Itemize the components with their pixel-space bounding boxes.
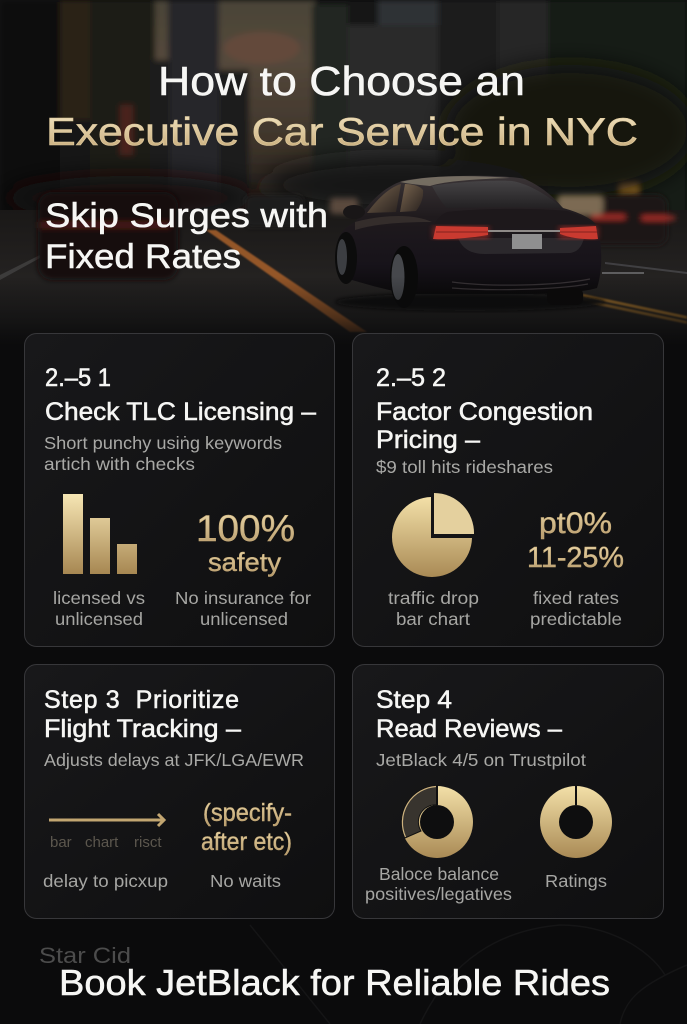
step description: [44, 433, 282, 474]
call to action: Book JetBlack for Reliable Rides: [59, 962, 610, 1003]
step description: JetBlack 4/5 on Trustpilot: [376, 750, 586, 770]
step heading: Pricing –: [376, 426, 480, 454]
step heading: Check TLC Licensing –: [45, 398, 316, 426]
rear window: [432, 181, 563, 208]
chart caption: unlicensed: [55, 609, 143, 629]
stat caption: [530, 588, 622, 629]
stat caption: predictable: [530, 609, 622, 629]
step heading: [44, 686, 241, 743]
chrome strip: [486, 230, 562, 232]
donut chart: ratings: [540, 785, 612, 858]
panel: step 1 licensing: [24, 334, 334, 646]
donut chart: balance: [401, 785, 473, 858]
faint car outline: [250, 925, 687, 1024]
step description: Short punchy usiṅg keywords: [44, 433, 282, 453]
rear wheel: [335, 232, 357, 284]
donut caption: [365, 864, 512, 904]
stat caption: unlicensed: [200, 609, 288, 629]
panel: step 4 reviews: [352, 664, 664, 918]
donut caption: Baloce balance: [379, 864, 499, 884]
stat: specify after: (specify-: [203, 799, 292, 827]
step description: $9 toll hits rideshares: [376, 457, 553, 477]
chart caption: [53, 588, 145, 629]
panel: step 3 flight tracking: [24, 664, 334, 918]
hero car: [335, 176, 605, 311]
licence plate: [512, 234, 542, 249]
subtitle: [45, 197, 328, 276]
faded chart label: bar: [50, 834, 72, 851]
subtitle: Skip Surges with: [45, 197, 328, 235]
side mirror: [343, 205, 365, 219]
step heading: Read Reviews –: [376, 715, 562, 743]
step heading: Factor Congestion: [376, 398, 593, 426]
stat: percentages: [527, 507, 624, 574]
lower trunk panel: [458, 238, 584, 254]
chart caption: delay to picxup: [43, 871, 168, 891]
step description: artich with checks: [44, 454, 195, 474]
step heading: Flight Tracking –: [44, 715, 241, 743]
bar chart: [63, 494, 137, 574]
stat: specify after: after etc): [201, 828, 292, 856]
title: [46, 58, 638, 154]
stat caption: No waits: [210, 871, 281, 891]
stat caption: fixed rates: [533, 588, 619, 608]
chart caption: bar chart: [396, 609, 470, 629]
title: How to Choose an: [158, 58, 525, 104]
stat: percentages: 11-25%: [527, 542, 624, 574]
trunk lid: [433, 209, 598, 228]
arrow: [49, 814, 164, 826]
car body: [337, 176, 601, 294]
step heading: [376, 398, 593, 454]
ratings caption: Ratings: [545, 871, 607, 891]
front wheel: [390, 246, 418, 308]
chart caption: licensed vs: [53, 588, 145, 608]
faded chart label: chart: [85, 834, 119, 851]
step number: 2.–5 2: [376, 364, 446, 392]
faded footer label: Star Cid: [39, 943, 131, 968]
step heading: Step 3 Prioritize: [44, 686, 239, 714]
step number: 2.–5 1: [45, 364, 111, 392]
pie chart: [392, 493, 474, 577]
subtitle: Fixed Rates: [45, 238, 241, 276]
panel: step 2 congestion: [352, 334, 664, 646]
chart caption: traffic drop: [388, 588, 479, 608]
stat caption: [175, 588, 311, 629]
stat: 100% safety: [196, 508, 295, 577]
stat caption: No insurance for: [175, 588, 311, 608]
chart caption: [388, 588, 479, 629]
tail lights: [433, 226, 488, 239]
step description: Adjusts delays at JFK/LGA/EWR: [44, 750, 304, 770]
donut caption: positives/legatives: [365, 884, 512, 904]
side highlight: [355, 216, 432, 230]
side windows: [367, 184, 401, 213]
bumper: [452, 279, 590, 290]
stat: 100% safety: 100%: [196, 508, 295, 549]
step heading: [376, 686, 562, 743]
stat: 100% safety: safety: [208, 547, 281, 577]
title: Executive Car Service in NYC: [46, 111, 638, 154]
stat: percentages: pt0%: [539, 507, 612, 540]
stat: specify after: [201, 799, 292, 856]
hero photo: city street: [0, 0, 687, 345]
roof highlight: [400, 176, 510, 186]
faded chart label: risct: [134, 834, 162, 851]
step heading: Step 4: [376, 686, 452, 714]
